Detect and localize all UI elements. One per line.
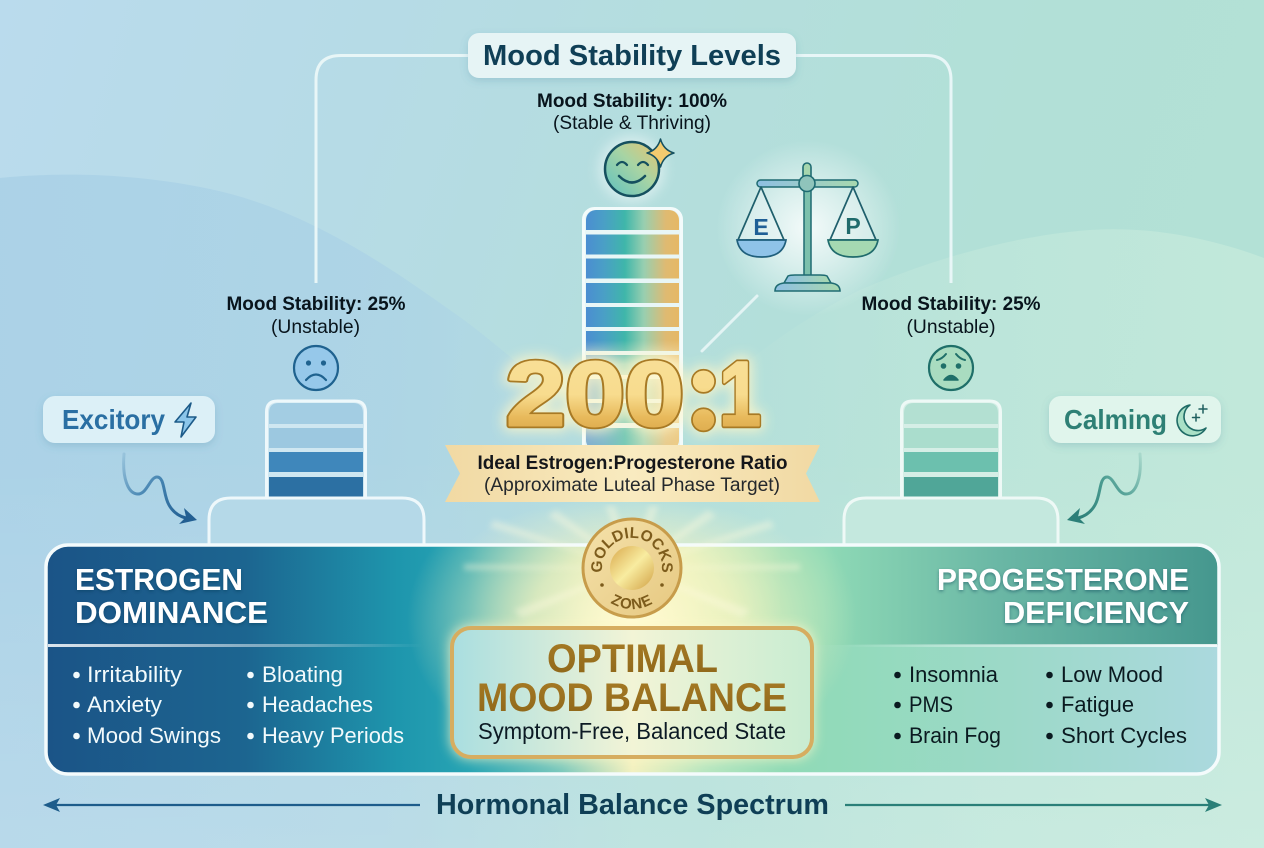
symptom list: progesterone deficiency: Insomnia [909,662,998,687]
calming pill: Calming [1064,404,1167,435]
icon: crescent moon with stars [1177,405,1207,436]
left divider [48,644,423,647]
symptom list: estrogen dominance: Headaches [262,692,373,717]
arrow: spectrum left [43,798,420,812]
icon: balance scale: E [753,214,769,240]
ratio number 200:1: 1 [719,344,761,446]
left pedestal [209,498,424,545]
left stability label: Mood Stability: 25% [226,293,406,315]
heading: estrogen dominance: DOMINANCE [75,596,268,630]
ribbon: ideal ratio [445,445,820,502]
ratio number 200:1: : [684,321,724,454]
center stability label [537,90,727,134]
left stability label: (Unstable) [271,316,360,338]
symptom list: progesterone deficiency: Short Cycles [1061,723,1187,748]
ribbon: ideal ratio: Ideal Estrogen:Progesterone Ratio [478,453,788,474]
right level bar [902,401,1000,498]
ratio number 200:1: 200 [506,344,684,446]
excitory pill [43,396,215,443]
center stability label: (Stable & Thriving) [553,112,711,134]
goldilocks zone badge: GOLDILOCKS [591,527,673,572]
wavy arrow: calming [1067,454,1140,524]
center glow [414,546,845,764]
heading: progesterone deficiency: DEFICIENCY [1003,596,1189,630]
soft glow above panel [462,498,802,618]
symptom list: progesterone deficiency: PMS [909,692,953,717]
icon: happy face with sparkle [599,136,674,202]
icon: sad face [294,346,338,390]
chart title pill: Mood Stability Levels [483,40,781,72]
right stability label: (Unstable) [906,316,996,338]
excitory pill: Excitory [62,404,165,435]
ratio number 200:1: 200 [506,344,684,446]
right divider [842,644,1217,647]
chart title pill [468,33,796,78]
center level bar [584,208,682,458]
connector bracket [316,56,951,283]
arrow: spectrum right [845,798,1222,812]
wavy arrow: excitory [124,454,197,524]
heading: estrogen dominance: ESTROGEN [75,563,243,597]
symptom list: estrogen dominance: Heavy Periods [262,723,404,748]
symptom list: progesterone deficiency: Low Mood [1061,662,1163,687]
symptom list: estrogen dominance [73,662,404,748]
symptom list: estrogen dominance: Irritability [87,662,183,687]
symptom list: estrogen dominance: Bloating [262,662,343,687]
icon: worried face [929,346,973,390]
right stability label [862,293,1040,338]
heading: estrogen dominance [75,563,268,630]
ratio number 200:1 [506,321,761,454]
center stability label: Mood Stability: 100% [537,90,727,112]
icon: lightning bolt [175,403,196,437]
left level bar [266,401,366,498]
spectrum title: Hormonal Balance Spectrum [436,789,829,821]
left stability label [226,293,406,338]
optimal mood balance box: OPTIMAL [547,637,718,681]
ratio number 200:1: : [684,321,724,454]
symptom list: progesterone deficiency: Fatigue [1061,692,1134,717]
icon: balance scale [716,140,900,316]
calming pill [1049,396,1221,443]
right pedestal [844,498,1058,545]
background wave left [0,175,640,848]
ratio number 200:1: : [684,321,724,454]
heading: progesterone deficiency [937,563,1189,630]
ratio number 200:1: 200 [506,344,684,446]
goldilocks zone badge: ZONE [610,594,652,610]
ribbon: ideal ratio: (Approximate Luteal Phase Target) [484,475,780,496]
right header band [846,546,1218,645]
sunburst rays [464,506,800,618]
symptom list: progesterone deficiency: Brain Fog [909,723,1001,748]
symptom list: progesterone deficiency [894,662,1187,748]
ratio number 200:1: 1 [719,344,761,446]
optimal mood balance box: MOOD BALANCE [477,676,787,720]
goldilocks zone badge [582,518,682,618]
optimal mood balance box: Symptom-Free, Balanced State [478,718,786,744]
icon: balance scale: P [845,213,861,239]
ratio number 200:1: 1 [719,344,761,446]
main spectrum panel [44,543,1221,776]
heading: progesterone deficiency: PROGESTERONE [937,563,1189,597]
symptom list: estrogen dominance: Anxiety [87,692,163,717]
background wave right [700,229,1264,848]
leader line from scale to ratio [702,296,757,351]
optimal mood balance box [450,626,814,759]
symptom list: estrogen dominance: Mood Swings [87,723,221,748]
right stability label: Mood Stability: 25% [862,293,1040,315]
background lower light [0,450,1264,848]
